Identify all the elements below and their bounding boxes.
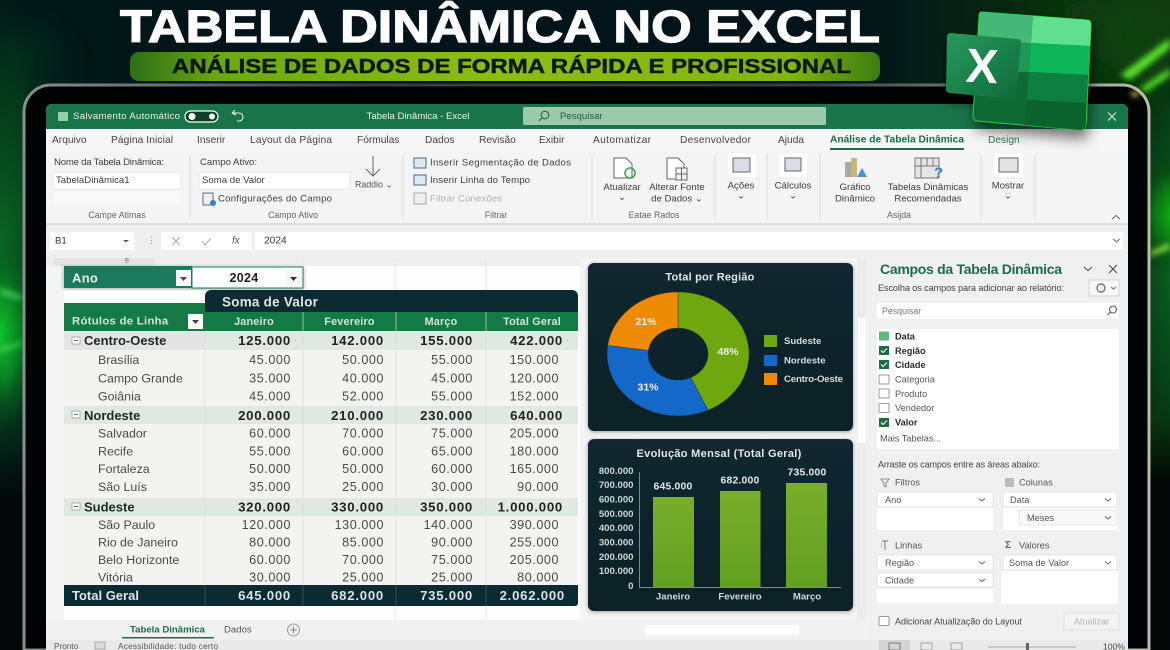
panel: campos da tabela dinâmica: Arraste os campos entre as áreas abaixo:: [878, 460, 1040, 470]
legend: [764, 335, 843, 385]
table rows: 1.000.000: [498, 500, 563, 514]
area: filtros: Ano: [885, 495, 901, 505]
group: nome da tabela: [53, 157, 181, 220]
group: cálculos: Cálculos: [775, 180, 812, 192]
y axis: 700.000: [599, 480, 634, 491]
ribbon tabs: Dados: [425, 135, 454, 146]
search field: [877, 303, 1119, 319]
grand total row: Total Geral: [72, 588, 139, 603]
table rows: 205.000: [510, 426, 559, 440]
group: filtrar: [414, 158, 571, 220]
table header: [64, 290, 578, 331]
group: campo ativo: Raddio ⌄: [355, 180, 393, 190]
table rows: 75.000: [431, 426, 473, 440]
title bar: Tabela Dinâmica - Excel: [367, 111, 469, 122]
table rows: 50.000: [249, 462, 291, 476]
table rows: 70.000: [342, 553, 384, 567]
table header: Total Geral: [503, 316, 561, 328]
y axis: [599, 466, 841, 592]
group: dados: Atualizar: [603, 182, 641, 193]
group: dados: Eatae Rados: [629, 210, 680, 220]
table rows: 330.000: [331, 500, 384, 514]
table rows: 320.000: [238, 500, 291, 514]
group: campo ativo: Campo Ativo:: [200, 157, 257, 168]
table rows: Centro-Oeste: [84, 333, 166, 348]
area: colunas: Colunas: [1019, 478, 1053, 488]
table rows: 30.000: [431, 480, 473, 494]
ribbon tabs: Ajuda: [778, 135, 804, 146]
worksheet area: B: [125, 258, 129, 264]
table rows: São Luís: [98, 480, 147, 494]
group: ações: Ações: [728, 180, 755, 192]
field list: [877, 329, 1119, 449]
formula bar: fx: [232, 236, 241, 246]
group: filtrar: Filtrar: [485, 210, 507, 220]
grand total row: [64, 585, 578, 606]
table rows: 205.000: [510, 553, 559, 567]
table rows: 60.000: [249, 426, 291, 440]
table rows: Nordeste: [84, 408, 140, 423]
group: nome da tabela: TabelaDinâmica1: [56, 175, 130, 186]
table rows: Salvador: [98, 426, 147, 440]
table rows: 125.000: [238, 333, 291, 348]
group: dados: Alterar Fonte: [649, 182, 705, 193]
table rows: 25.000: [342, 570, 384, 584]
table rows: 75.000: [431, 553, 473, 567]
table rows: 55.000: [431, 390, 473, 404]
group: nome da tabela: Nome da Tabela Dinâmica:: [54, 157, 164, 168]
sheet tabs: Dados: [224, 624, 252, 636]
group: campo ativo: Campo Ativo: [268, 210, 318, 220]
group: filtrar: Inserir Linha do Tempo: [430, 175, 530, 186]
bars: 682.000: [721, 476, 759, 486]
group: dados: [603, 158, 705, 220]
table rows: 85.000: [342, 536, 384, 550]
table rows: 90.000: [517, 480, 559, 494]
table rows: Rio de Janeiro: [98, 536, 178, 550]
table rows: 120.000: [510, 372, 559, 386]
search field: Pesquisar: [882, 306, 921, 316]
group: filtrar: Filtrar Conexões: [430, 194, 502, 204]
area: linhas: Cidade: [885, 576, 914, 586]
field list: Valor: [895, 418, 918, 428]
excel window: [46, 104, 1128, 650]
table rows: 45.000: [431, 372, 473, 386]
ribbon tabs: Design: [988, 135, 1020, 146]
group: ações: [728, 154, 756, 202]
bars: Janeiro: [656, 592, 690, 602]
title bar: Salvamento Automático: [73, 111, 180, 122]
table rows: 30.000: [249, 570, 291, 584]
layout update: [879, 613, 1119, 630]
table rows: Campo Grande: [98, 372, 183, 386]
area: colunas: [1003, 478, 1118, 530]
panel: bar chart evolução mensal: Evolução Mensal (Total Geral): [636, 448, 802, 460]
table rows: 35.000: [249, 372, 291, 386]
y axis: 0: [628, 581, 634, 592]
table header: Rótulos de Linha: [72, 316, 169, 328]
formula bar: B1: [55, 236, 67, 246]
legend: Nordeste: [784, 356, 826, 366]
table rows: 55.000: [431, 353, 473, 367]
table rows: Belo Horizonte: [98, 553, 179, 567]
table rows: 90.000: [431, 536, 473, 550]
area: colunas: Data: [1010, 495, 1030, 505]
group: mostrar: [992, 154, 1120, 219]
group: gráfico dinâmico e recomendadas: Dinâmico: [835, 194, 875, 204]
y axis: 200.000: [599, 552, 634, 563]
table rows: 390.000: [510, 518, 559, 532]
field list: Região: [895, 346, 926, 356]
donut: 48%: [717, 346, 739, 358]
icon: excel logo: [946, 12, 1091, 130]
ribbon tabs: Automatizar: [593, 135, 652, 146]
table rows: 140.000: [424, 518, 473, 532]
status bar: [46, 640, 1128, 650]
table rows: 255.000: [510, 536, 559, 550]
formula bar: 2024: [264, 236, 287, 246]
grand total row: 735.000: [420, 588, 473, 603]
ribbon tabs: Fórmulas: [357, 135, 399, 146]
donut: 21%: [635, 316, 657, 328]
grand total row: 2.062.000: [500, 588, 565, 603]
table rows: 130.000: [335, 518, 384, 532]
table rows: 35.000: [249, 480, 291, 494]
table rows: 50.000: [342, 462, 384, 476]
icon: excel front tile: [946, 33, 1021, 99]
table rows: 200.000: [238, 408, 291, 423]
group: gráfico dinâmico e recomendadas: ?: [934, 164, 943, 182]
ribbon tabs: Página Inicial: [111, 135, 173, 146]
group: cálculos: [775, 154, 812, 202]
table rows: 45.000: [249, 390, 291, 404]
y axis: 100.000: [599, 566, 634, 577]
table rows: 80.000: [517, 570, 559, 584]
bars: [653, 468, 827, 602]
ribbon tabs: Exibir: [539, 135, 565, 146]
field list: Data: [895, 332, 916, 342]
title: TABELA DINÂMICA NO EXCEL: [120, 1, 880, 52]
table header: Março: [425, 316, 458, 328]
formula bar: ⋮: [147, 235, 156, 245]
sheet tabs: Tabela Dinâmica: [130, 624, 206, 636]
table rows: Sudeste: [84, 500, 135, 514]
group: gráfico dinâmico e recomendadas: Tabelas Dinâmicas: [888, 182, 968, 193]
ribbon tabs: Revisão: [479, 135, 516, 146]
donut: 31%: [637, 382, 659, 394]
sheet tabs: [122, 624, 799, 638]
ribbon tabs: Layout da Página: [250, 135, 332, 146]
area: valores: Σ: [1005, 540, 1011, 551]
table rows: 60.000: [249, 553, 291, 567]
panel: campos da tabela dinâmica: Escolha os campos para adicionar ao relatório:: [878, 283, 1064, 293]
table rows: 65.000: [431, 444, 473, 458]
table rows: 55.000: [249, 444, 291, 458]
group: nome da tabela: Campe Atimas: [88, 210, 146, 220]
ribbon body: [46, 152, 1128, 225]
group: campo ativo: Soma de Valor: [202, 175, 266, 186]
table rows: 350.000: [420, 500, 473, 514]
table rows: Vitória: [98, 570, 133, 584]
layout update: Adicionar Atualização do Layout: [895, 616, 1022, 626]
bars: Fevereiro: [718, 592, 762, 602]
field list: Categoria: [895, 374, 936, 384]
ribbon tabs: [52, 135, 1019, 150]
area: valores: Soma de Valor: [1009, 558, 1069, 568]
group: campo ativo: Configurações do Campo: [218, 194, 332, 204]
field list: Produto: [895, 389, 927, 399]
subtitle banner: ANÁLISE DE DADOS DE FORMA RÁPIDA E PROFISSIONAL: [172, 55, 851, 78]
table rows: 155.000: [420, 333, 473, 348]
table rows: 70.000: [342, 426, 384, 440]
group: campo ativo: [199, 156, 393, 220]
panel: bar chart evolução mensal: [588, 439, 853, 611]
legend: Sudeste: [784, 336, 821, 347]
panel: campos da tabela dinâmica: Campos da Tabela Dinâmica: [880, 261, 1062, 277]
group: dados: de Dados ⌄: [651, 194, 703, 204]
report filter: ano: Ano: [72, 270, 98, 286]
report filter: ano: [64, 266, 303, 288]
donut: [607, 292, 749, 416]
panel: donut chart total por região: Total por Região: [665, 272, 755, 284]
table rows: São Paulo: [98, 518, 155, 532]
area: valores: Valores: [1019, 540, 1050, 550]
title bar: [46, 104, 1128, 129]
table rows: 210.000: [331, 408, 384, 423]
table rows: 422.000: [510, 333, 563, 348]
area: colunas: Meses: [1027, 513, 1054, 523]
area: linhas: Linhas: [895, 540, 922, 550]
y axis: 800.000: [599, 466, 634, 477]
group: gráfico dinâmico e recomendadas: Asijda: [887, 210, 911, 220]
table header: Soma de Valor: [222, 294, 319, 310]
legend: Centro-Oeste: [784, 374, 843, 385]
report filter: ano: 2024: [229, 271, 259, 285]
table rows: Fortaleza: [98, 462, 150, 476]
table rows: [64, 331, 578, 585]
table rows: 142.000: [331, 333, 384, 348]
table rows: 152.000: [510, 390, 559, 404]
table rows: 120.000: [242, 518, 291, 532]
area: valores: [1001, 540, 1118, 604]
table rows: Brasília: [98, 353, 139, 367]
layout update: Atualizar: [1074, 616, 1109, 626]
group: ações: ⌄: [737, 190, 745, 202]
table header: Janeiro: [234, 316, 274, 328]
field list: Mais Tabelas...: [880, 434, 941, 444]
ribbon tabs: Inserir: [197, 135, 226, 146]
area: filtros: [877, 478, 993, 530]
table rows: Goiânia: [98, 390, 141, 404]
icon: excel front tile: X: [965, 40, 999, 94]
table rows: 40.000: [342, 372, 384, 386]
area: filtros: Filtros: [895, 478, 920, 488]
table rows: 80.000: [249, 536, 291, 550]
panel: donut chart total por região: [588, 263, 853, 431]
group: gráfico dinâmico e recomendadas: Gráfico: [840, 182, 870, 193]
ribbon tabs: Arquivo: [52, 135, 87, 146]
table rows: Recife: [98, 444, 133, 458]
bars: 645.000: [654, 482, 692, 492]
field list: Cidade: [895, 360, 926, 370]
bars: 735.000: [788, 468, 826, 478]
group: mostrar: Mostrar: [992, 180, 1025, 192]
table rows: 25.000: [342, 480, 384, 494]
grand total row: 682.000: [331, 588, 384, 603]
table rows: 25.000: [431, 570, 473, 584]
y axis: 400.000: [599, 523, 634, 534]
group: mostrar: ⌄: [1004, 190, 1012, 202]
table rows: 230.000: [420, 408, 473, 423]
group: gráfico dinâmico e recomendadas: [835, 158, 968, 220]
pivot table: [64, 290, 578, 606]
group: dados: ⌄: [618, 192, 626, 203]
table rows: 150.000: [510, 353, 559, 367]
table rows: 45.000: [249, 353, 291, 367]
area: linhas: [877, 540, 993, 603]
table header: Fevereiro: [324, 316, 375, 328]
field list: Vendedor: [895, 403, 934, 413]
area: linhas: Região: [885, 558, 914, 568]
grand total row: 645.000: [238, 588, 291, 603]
y axis: 600.000: [599, 494, 634, 506]
panel: campos da tabela dinâmica: [876, 264, 1120, 630]
worksheet area: [46, 258, 868, 620]
table rows: 640.000: [510, 408, 563, 423]
bars: Março: [793, 592, 821, 602]
table rows: 52.000: [342, 390, 384, 404]
formula bar: [50, 232, 1123, 250]
table rows: 50.000: [342, 353, 384, 367]
table rows: 60.000: [431, 462, 473, 476]
group: cálculos: ⌄: [789, 190, 797, 202]
group: filtrar: Inserir Segmentação de Dados: [430, 158, 571, 168]
ribbon tabs: Análise de Tabela Dinâmica: [830, 134, 964, 146]
table rows: 60.000: [342, 444, 384, 458]
title bar: Pesquisar: [560, 111, 603, 122]
group: gráfico dinâmico e recomendadas: Recomendadas: [894, 194, 962, 204]
y axis: 300.000: [599, 538, 634, 548]
subtitle banner: [130, 52, 880, 81]
ribbon tabs: Desenvolvedor: [680, 135, 752, 146]
y axis: 500.000: [599, 509, 634, 520]
table rows: 180.000: [510, 444, 559, 458]
table rows: 165.000: [510, 462, 559, 476]
